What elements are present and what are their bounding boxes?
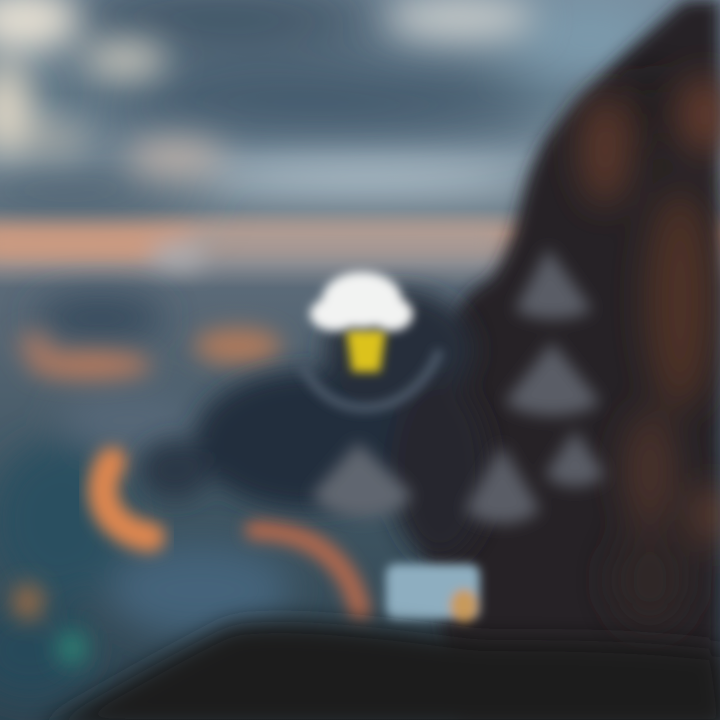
- storm clouds: [0, 0, 680, 212]
- brown cliff on the right: [420, 0, 720, 720]
- orange river curves: [103, 462, 360, 612]
- icon: ring around cloud: [302, 350, 440, 408]
- icon: white cloud with yellow bolt: [310, 272, 413, 372]
- sunset horizon band: [0, 228, 500, 270]
- icon: grey cloud shapes: [312, 248, 605, 524]
- dark foreground ridge: [40, 622, 720, 720]
- distant city with glowing lights: [0, 296, 290, 700]
- dark central mass: [140, 290, 490, 560]
- device card with light screen: [386, 564, 480, 623]
